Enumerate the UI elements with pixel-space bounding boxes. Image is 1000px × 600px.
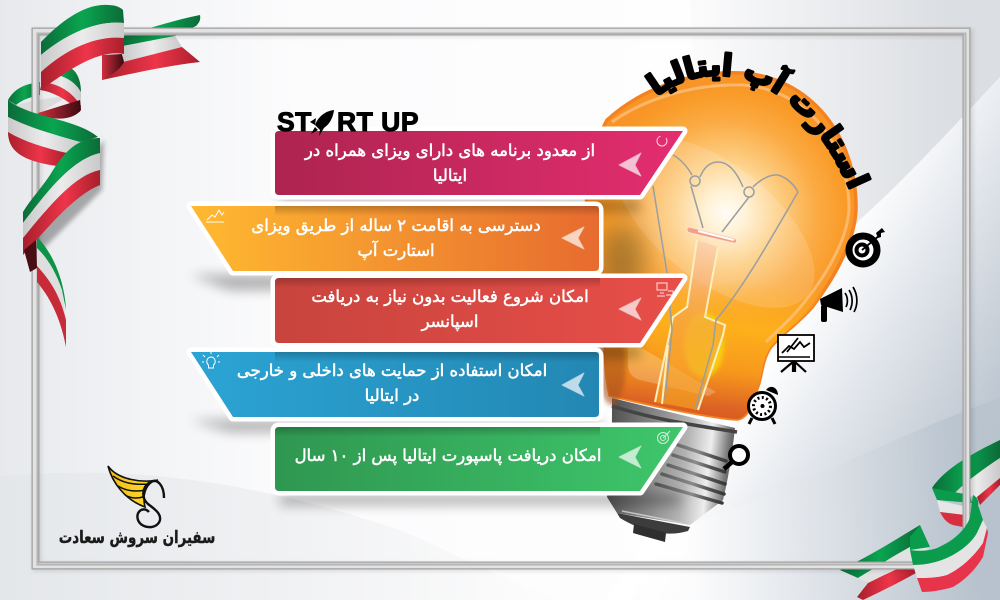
icon: alarm clock: [748, 387, 778, 424]
icon: small headset: [657, 136, 667, 146]
logo name: سفیران سروش سعادت: [59, 527, 215, 547]
text: passport: امکان دریافت پاسپورت ایتالیا پس از ۱۰ سال: [295, 446, 601, 466]
start up wordmark: ST: [277, 107, 312, 137]
icon: arrow: [619, 153, 641, 176]
ribbon tails behind frame: bottom right: [840, 440, 1000, 600]
text: support: در ایتالیا: [365, 386, 419, 406]
panel: blue support: [191, 351, 599, 417]
bulb highlight: [586, 104, 844, 340]
icon: magnifier: [724, 446, 748, 469]
text: support: امکان استفاده از حمایت های داخلی و خارجی: [237, 361, 547, 381]
text: sponsor: امکان شروع فعالیت بدون نیاز به دریافت: [311, 287, 589, 307]
icon: rocket: [310, 110, 334, 136]
icon: arrow: [619, 298, 641, 320]
heading: curved title: استارت آپ ایتالیا: [644, 51, 872, 190]
logo wing: [108, 466, 158, 507]
upper band: [41, 5, 124, 55]
start up wordmark: RT UP: [337, 107, 419, 137]
ribbon tails behind frame: top left: [8, 15, 200, 113]
icon: small bulb: [202, 351, 220, 368]
lower tail: [37, 237, 66, 310]
icon: target: [849, 228, 885, 264]
icon: arrow: [562, 373, 584, 396]
bulb metal base: [607, 398, 737, 542]
panel: pink visa programs: [275, 131, 683, 195]
text: residence: استارت آپ: [357, 241, 435, 261]
back loop: [42, 67, 81, 100]
descending band: [23, 138, 100, 223]
icon: arrow: [619, 446, 641, 468]
bulb shadow from panels: [600, 224, 644, 300]
ribbon: top left: [8, 5, 124, 347]
illustration: light bulb: [586, 73, 856, 542]
bulb inner rim: [612, 85, 849, 342]
logo stripes: [113, 476, 150, 498]
icon: megaphone: [820, 287, 857, 322]
wide band: [8, 100, 98, 142]
text: programs: از معدود برنامه های دارای ویزای همراه در: [304, 141, 595, 161]
icon: small target: [658, 431, 670, 444]
panel: red no sponsor: [275, 278, 683, 343]
text: sponsor: اسپانسر: [421, 312, 478, 332]
panel: green passport: [275, 427, 683, 491]
icon: presentation board: [778, 335, 814, 372]
filament wires: [653, 155, 798, 410]
panel: orange visa access: [191, 206, 599, 271]
icon: small chart: [206, 210, 224, 222]
logo: [59, 466, 215, 547]
start up wordmark: [277, 107, 419, 137]
fold: [102, 54, 124, 80]
ribbon: bottom right: [910, 495, 988, 592]
icon: arrow: [562, 227, 584, 249]
bulb glass: [586, 73, 856, 419]
bulb dark side: [598, 325, 626, 405]
logo swan: [137, 481, 164, 527]
text: programs: ایتالیا: [433, 166, 467, 185]
bulb panel reflection: [628, 340, 716, 396]
icon: small monitor: [657, 283, 673, 296]
panel shadows: [190, 200, 680, 505]
filament stem: [655, 227, 737, 410]
text: residence: دسترسی به اقامت ۲ ساله از طریق ویزای: [251, 216, 541, 236]
bulb lower orange: [604, 270, 838, 419]
